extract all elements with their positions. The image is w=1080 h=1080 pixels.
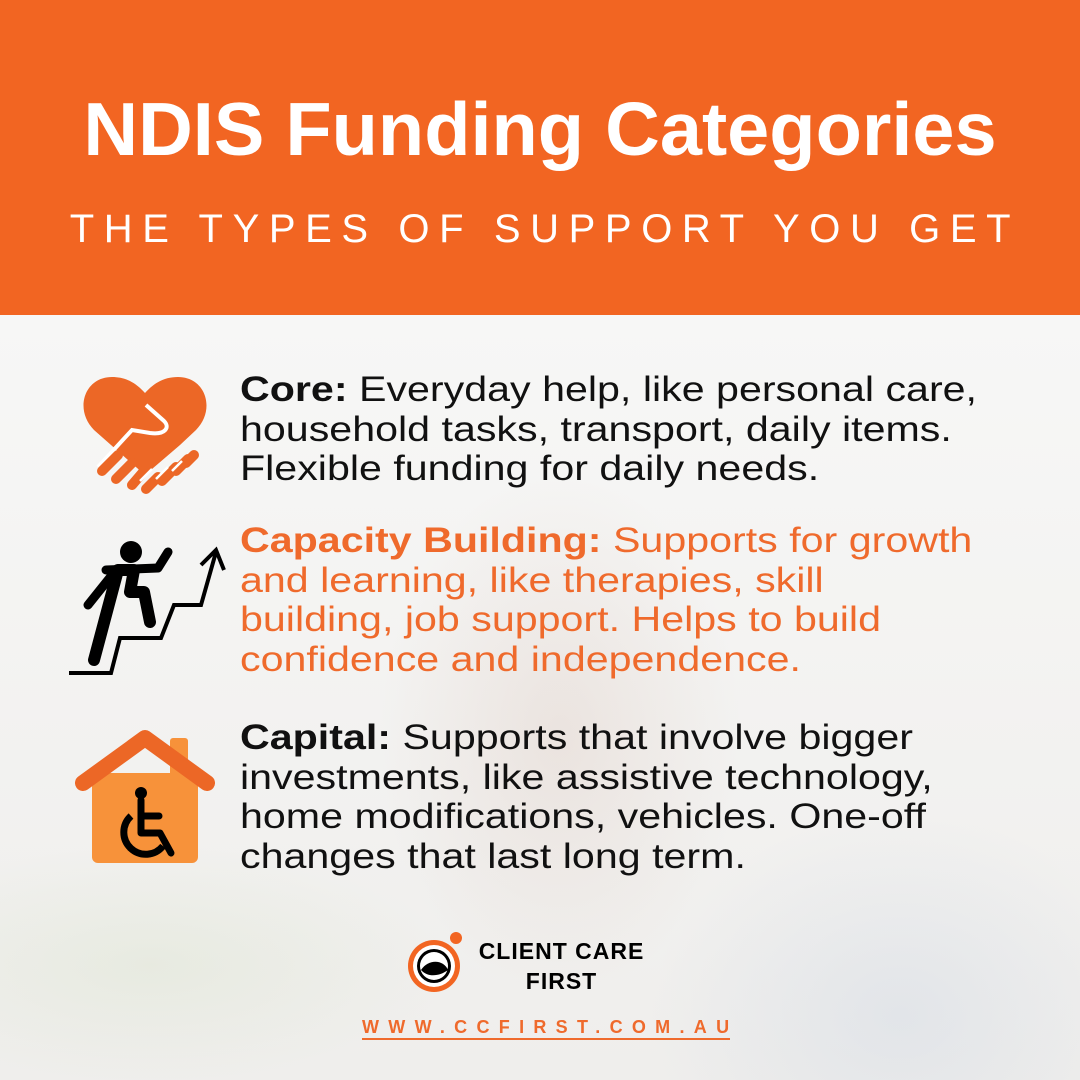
logo text: CLIENT CARE bbox=[479, 938, 644, 964]
text: capacity building: and learning, like therapies, skill bbox=[240, 560, 824, 600]
icon: heart handshake bbox=[84, 377, 206, 494]
title: NDIS Funding Categories bbox=[83, 87, 997, 171]
website url: WWW.CCFIRST.COM.AU bbox=[362, 1017, 738, 1037]
text: capacity building bbox=[240, 520, 972, 678]
icon: accessible house bbox=[75, 730, 215, 863]
subtitle: THE TYPES OF SUPPORT YOU GET bbox=[70, 207, 1020, 251]
text: core: Core: Everyday help, like personal care, bbox=[240, 369, 977, 409]
text: capital: investments, like assistive technology, bbox=[240, 756, 933, 796]
text: capacity building: confidence and independence. bbox=[240, 638, 801, 678]
text: core: household tasks, transport, daily items. bbox=[240, 408, 952, 448]
logo bbox=[408, 932, 644, 994]
logo text: FIRST bbox=[526, 968, 597, 994]
text: core bbox=[240, 369, 977, 488]
logo text bbox=[479, 938, 644, 994]
text: capital: home modifications, vehicles. One-off bbox=[240, 796, 926, 836]
icon: stair climber bbox=[69, 541, 226, 675]
text: capacity building: building, job support. Helps to build bbox=[240, 599, 881, 639]
text: capital bbox=[240, 717, 933, 876]
text: core: Flexible funding for daily needs. bbox=[240, 448, 819, 488]
header bbox=[0, 0, 1080, 315]
icon: logo mark bbox=[408, 932, 462, 992]
text: capital: Capital: Supports that involve bigger bbox=[240, 717, 913, 757]
text: capital: changes that last long term. bbox=[240, 836, 746, 876]
text: capacity building: Capacity Building: Supports for growth bbox=[240, 520, 972, 560]
